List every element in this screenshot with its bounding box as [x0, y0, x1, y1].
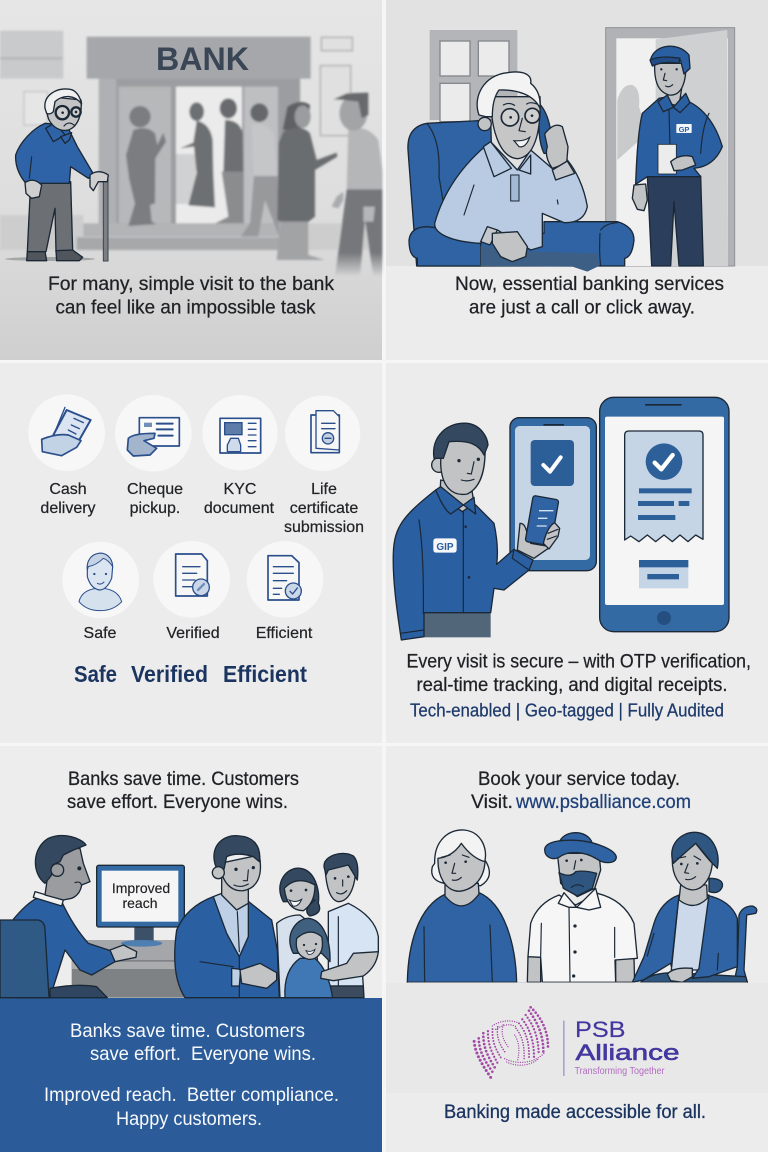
heading: safe verified efficient: Efficient [223, 661, 307, 687]
illustration: banker and family [0, 836, 378, 998]
caption: Now, essential banking services [455, 273, 724, 295]
illustration: man on phone and delivery agent [408, 28, 735, 272]
caption: are just a call or click away. [469, 296, 695, 318]
badge text: GIP [436, 542, 454, 553]
banker in suit [175, 836, 279, 998]
service labels: certificate [290, 500, 358, 517]
queue figure 6 [332, 93, 382, 277]
caption: Every visit is secure – with OTP verification, [406, 652, 751, 672]
heading [67, 769, 299, 813]
caption [455, 273, 724, 318]
elderly woman [407, 830, 517, 982]
icon: cheque pickup [115, 395, 192, 472]
seated bank employee [0, 836, 137, 998]
screen text [112, 880, 170, 911]
queue figure 4 [241, 103, 279, 237]
delivery agent with phone [393, 423, 560, 640]
benefit text: Happy customers. [116, 1109, 262, 1130]
illustration: agent and phones [393, 397, 729, 640]
seated man on phone [435, 72, 587, 262]
PSB Alliance logo mark [474, 1007, 548, 1077]
service labels: pickup. [130, 500, 180, 517]
small phone [510, 418, 596, 571]
BANK sign: BANK [156, 41, 249, 77]
service labels: Cash [49, 481, 87, 498]
icon: verified document [153, 541, 230, 618]
tagline: Tech-enabled | Geo-tagged | Fully Audited [410, 700, 724, 720]
heading: Visit. [471, 792, 513, 813]
caption: real-time tracking, and digital receipts. [416, 675, 728, 696]
benefit text [44, 1021, 339, 1130]
heading: save effort. Everyone wins. [67, 792, 288, 813]
caption [406, 652, 751, 696]
heading: www.psballiance.com [515, 792, 691, 813]
heading: safe verified efficient: Verified [131, 661, 208, 687]
heading: Banks save time. Customers [68, 769, 299, 790]
panel: book your service [386, 746, 768, 1152]
panel: secure visits [386, 363, 768, 743]
PSB Alliance wordmark: Transforming Together [574, 1065, 665, 1077]
icon: cash delivery [28, 394, 105, 471]
icon: life certificate [285, 396, 360, 471]
family [277, 853, 378, 998]
service labels: document [204, 500, 275, 517]
screen text: Improved [112, 880, 170, 896]
benefit text: save effort. Everyone wins. [90, 1044, 316, 1065]
panel: call or click [386, 0, 768, 360]
service labels: Cheque [127, 481, 183, 498]
screen text: reach [122, 895, 158, 911]
service labels [40, 481, 364, 642]
icon: elderly man with cane [5, 89, 108, 261]
queue figure 1 [126, 106, 166, 226]
service labels: delivery [40, 500, 96, 517]
panel: everyone wins [0, 746, 382, 1152]
man with hat [527, 833, 637, 982]
caption: can feel like an impossible task [56, 296, 316, 318]
heading [471, 769, 691, 813]
benefit text: Banks save time. Customers [70, 1021, 305, 1042]
large phone with receipt [600, 397, 729, 632]
badge text: GP [679, 125, 689, 134]
heading: safe verified efficient: Safe [74, 661, 117, 687]
PSB Alliance wordmark: Alliance [576, 1040, 680, 1065]
service labels: Life [311, 481, 337, 498]
tagline: Banking made accessible for all. [444, 1102, 706, 1123]
armchair [408, 120, 634, 272]
service labels: Verified [166, 625, 220, 642]
icon: efficient document [247, 541, 323, 618]
logo divider [563, 1021, 565, 1076]
illustration: three citizens [407, 830, 757, 1077]
queue figure 5 [277, 102, 337, 260]
service labels: Efficient [256, 625, 313, 642]
heading: Book your service today. [478, 769, 680, 790]
woman in wheelchair [407, 832, 757, 983]
delivery agent [632, 46, 722, 266]
service labels: KYC [224, 481, 256, 498]
panel: services [0, 363, 382, 743]
icon: KYC document [202, 395, 278, 470]
queue figure 2 [180, 102, 215, 207]
icon set [28, 394, 360, 618]
desk and monitor [72, 865, 185, 998]
queue figure 3 [215, 98, 243, 223]
service labels: Safe [84, 625, 117, 642]
panel: bank visit [0, 0, 382, 360]
caption [48, 273, 334, 318]
caption: For many, simple visit to the bank [48, 273, 334, 295]
PSB Alliance wordmark [574, 1017, 680, 1077]
benefit text: Improved reach. Better compliance. [44, 1085, 339, 1106]
heading: safe verified efficient [74, 661, 307, 687]
service labels: submission [284, 519, 364, 536]
illustration: crowded bank building [0, 31, 382, 277]
icon: safe person [62, 542, 139, 618]
PSB Alliance wordmark: PSB [575, 1017, 626, 1042]
